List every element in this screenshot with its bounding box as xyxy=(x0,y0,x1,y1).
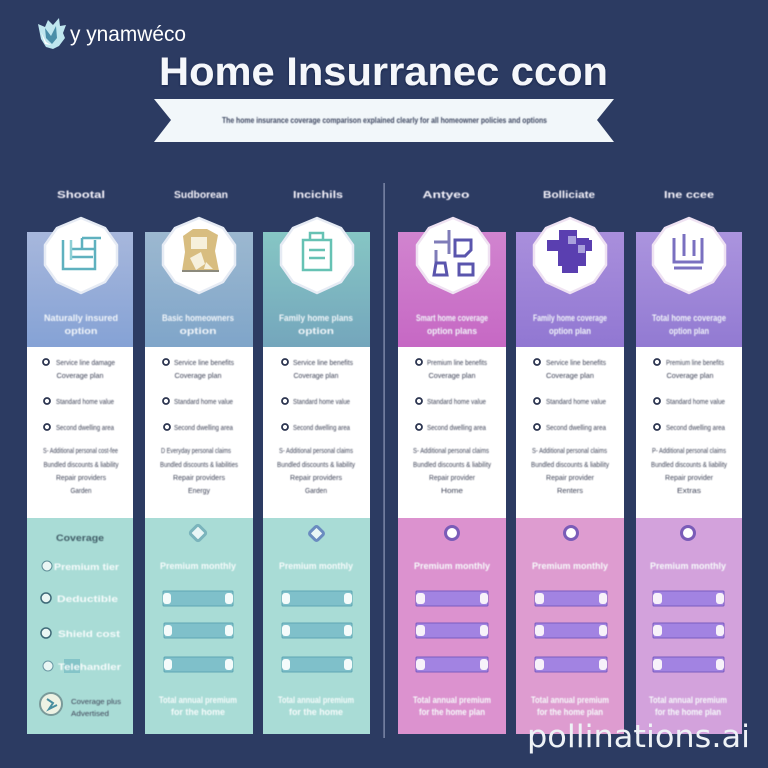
icon: document grid xyxy=(63,238,101,269)
footer xyxy=(145,518,253,734)
feature list: Bundled discounts & liability xyxy=(651,460,727,469)
badge xyxy=(534,218,606,293)
feature list: Coverage plan xyxy=(56,371,104,380)
column labels: Sudborean xyxy=(174,190,228,201)
coverage list: Telehandler xyxy=(58,662,121,673)
plan title xyxy=(533,313,607,337)
badge xyxy=(281,218,353,293)
feature list: Repair provider xyxy=(665,473,713,482)
coverage rows xyxy=(531,526,609,718)
icon: home pieces xyxy=(434,230,473,275)
coverage list: Deductible xyxy=(57,594,118,605)
feature list: S- Additional personal claims xyxy=(413,446,489,455)
plan title: Naturally insured xyxy=(44,313,118,324)
coverage rows: Premium monthly xyxy=(279,561,354,572)
feature list: Garden xyxy=(305,486,327,495)
logo xyxy=(38,18,186,49)
column labels: Incichils xyxy=(293,190,344,201)
footer xyxy=(636,518,742,734)
icon: logo leaf xyxy=(38,18,66,49)
feature list: Repair providers xyxy=(56,473,106,482)
coverage rows: Total annual premium xyxy=(278,695,354,706)
divider xyxy=(384,183,385,738)
column labels: Ine ccee xyxy=(664,190,715,201)
feature list: Standard home value xyxy=(174,397,233,406)
badge xyxy=(163,218,235,293)
plan title: Smart home coverage xyxy=(416,313,488,324)
feature list: Coverage plan xyxy=(294,371,338,380)
panel: column 5 xyxy=(516,218,624,734)
feature list: Bundled discounts & liabilities xyxy=(160,460,238,469)
feature list: Repair provider xyxy=(546,473,594,482)
feature list: Standard home value xyxy=(293,397,350,406)
feature list: Second dwelling area xyxy=(666,423,726,432)
panel: column 4 xyxy=(398,218,506,734)
feature list: Extras xyxy=(677,486,701,495)
coverage rows: for the home xyxy=(289,707,343,718)
feature list xyxy=(651,358,727,495)
header xyxy=(263,232,370,347)
coverage list xyxy=(41,533,121,673)
icon: clipboard xyxy=(303,233,331,270)
body xyxy=(516,347,624,518)
plan title: Basic homeowners xyxy=(162,313,234,324)
advisor note: Advertised xyxy=(71,709,109,718)
plan title: option plans xyxy=(427,326,477,337)
feature list: D Everyday personal claims xyxy=(161,446,231,455)
feature list: Second dwelling area xyxy=(293,423,351,432)
panel: column 2 xyxy=(145,218,253,734)
header xyxy=(398,232,506,347)
title: Home Insurranec ccon xyxy=(159,50,608,94)
badge xyxy=(653,218,725,293)
logo wordmark: y ynamwéco xyxy=(70,23,186,46)
feature list xyxy=(160,358,238,495)
coverage list: Premium tier xyxy=(54,562,119,573)
panel: column 3 xyxy=(263,218,370,734)
icon: tools xyxy=(674,234,702,268)
feature list: Service line benefits xyxy=(546,358,606,367)
feature list: Bundled discounts & liability xyxy=(413,460,491,469)
feature list: Service line benefits xyxy=(293,358,353,367)
feature list: Second dwelling area xyxy=(546,423,607,432)
coverage rows: for the home plan xyxy=(419,707,485,718)
coverage list: Shield cost xyxy=(58,629,121,640)
advisor note: Coverage plus xyxy=(71,697,121,706)
feature list: Renters xyxy=(557,486,583,495)
header xyxy=(27,232,133,347)
coverage rows: Total annual premium xyxy=(649,695,727,706)
coverage rows: for the home plan xyxy=(537,707,603,718)
feature list: Coverage plan xyxy=(428,371,476,380)
feature list: Bundled discounts & liability xyxy=(44,460,119,469)
feature list: Standard home value xyxy=(56,397,114,406)
coverage rows: Total annual premium xyxy=(159,695,237,706)
coverage rows xyxy=(278,526,354,718)
coverage rows: Premium monthly xyxy=(414,561,491,572)
panel: column 6 xyxy=(636,218,742,734)
plan title xyxy=(416,313,488,337)
body xyxy=(27,347,133,518)
plan title: option xyxy=(298,326,334,337)
column labels xyxy=(57,190,715,201)
header xyxy=(636,232,742,347)
panel: column 1 xyxy=(27,218,133,734)
header xyxy=(145,232,253,347)
feature list: Home xyxy=(441,486,463,495)
coverage rows: for the home xyxy=(171,707,225,718)
coverage rows: Total annual premium xyxy=(413,695,491,706)
feature list: S- Additional personal cost-fee xyxy=(43,446,118,455)
feature list: Second dwelling area xyxy=(427,423,487,432)
body xyxy=(398,347,506,518)
watermark: pollinations.ai xyxy=(527,719,750,755)
plan title: Family home coverage xyxy=(533,313,607,324)
coverage rows: Premium monthly xyxy=(160,561,237,572)
feature list: Service line damage xyxy=(56,358,115,367)
plan title: option xyxy=(64,326,98,337)
plan title: Total home coverage xyxy=(652,313,726,324)
advisor note xyxy=(71,697,121,718)
coverage rows: Premium monthly xyxy=(650,561,727,572)
feature list: Second dwelling area xyxy=(56,423,115,432)
feature list: Service line benefits xyxy=(174,358,234,367)
feature list: S- Additional personal claims xyxy=(532,446,607,455)
plan title: Family home plans xyxy=(279,313,353,324)
coverage rows: Total annual premium xyxy=(531,695,609,706)
feature list: Premium line benefits xyxy=(427,358,487,367)
plan title xyxy=(162,313,234,337)
coverage rows: for the home plan xyxy=(655,707,721,718)
feature list xyxy=(531,358,609,495)
feature list: Standard home value xyxy=(427,397,486,406)
column labels: Shootal xyxy=(57,190,105,201)
footer xyxy=(27,518,133,734)
plan title xyxy=(279,313,353,337)
feature list xyxy=(413,358,491,495)
feature list: Coverage plan xyxy=(666,371,714,380)
footer xyxy=(263,518,370,734)
body xyxy=(145,347,253,518)
header xyxy=(516,232,624,347)
feature list xyxy=(43,358,119,495)
column labels: Antyeo xyxy=(422,190,470,201)
feature list: Second dwelling area xyxy=(174,423,234,432)
feature list xyxy=(277,358,355,495)
coverage rows xyxy=(413,526,491,718)
icon: advisor badge xyxy=(40,693,62,715)
feature list: Bundled discounts & liability xyxy=(531,460,609,469)
badge xyxy=(45,218,117,293)
plan title: option xyxy=(180,326,217,337)
feature list: S- Additional personal claims xyxy=(279,446,353,455)
feature list: Bundled discounts & liability xyxy=(277,460,355,469)
feature list: Energy xyxy=(188,486,210,495)
icon: gold package xyxy=(182,229,219,271)
feature list: Coverage plan xyxy=(546,371,594,380)
footer xyxy=(398,518,506,734)
feature list: P- Additional personal claims xyxy=(652,446,726,455)
feature list: Repair providers xyxy=(290,473,342,482)
body xyxy=(636,347,742,518)
footer xyxy=(516,518,624,734)
icon: purple house xyxy=(547,230,592,273)
plan title: option plan xyxy=(669,326,709,337)
feature list: Premium line benefits xyxy=(666,358,724,367)
plan title: option plan xyxy=(549,326,591,337)
column labels: Bolliciate xyxy=(543,190,596,201)
feature list: Coverage plan xyxy=(174,371,222,380)
body xyxy=(263,347,370,518)
feature list: Garden xyxy=(70,486,92,495)
coverage rows: Premium monthly xyxy=(532,561,609,572)
plan title xyxy=(44,313,118,337)
feature list: Repair provider xyxy=(429,473,475,482)
feature list: Standard home value xyxy=(546,397,606,406)
banner subtitle: The home insurance coverage comparison explained clearly for all homeowner policies and options xyxy=(222,115,547,125)
feature list: Repair providers xyxy=(173,473,225,482)
feature list: Standard home value xyxy=(666,397,725,406)
plan title xyxy=(652,313,726,337)
coverage list: Coverage xyxy=(56,533,104,543)
banner xyxy=(154,99,614,142)
coverage rows xyxy=(159,525,237,718)
badge xyxy=(417,218,489,293)
coverage rows xyxy=(649,526,727,718)
